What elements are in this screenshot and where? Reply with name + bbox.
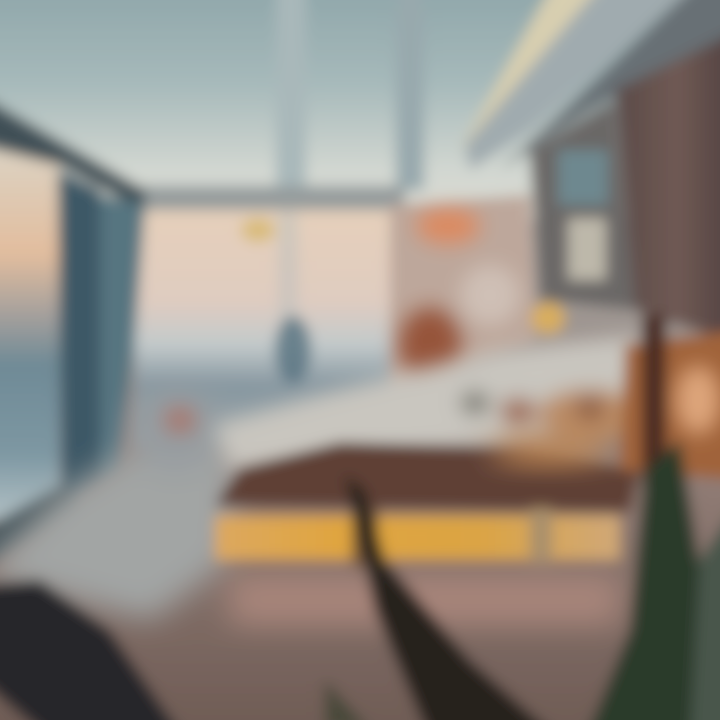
central window	[135, 205, 400, 445]
pendant light	[241, 218, 275, 242]
wooden counter band	[215, 435, 640, 512]
wall art panel	[390, 195, 565, 390]
sky	[0, 0, 720, 220]
foreground dark shape lower left	[0, 580, 185, 720]
window frame posts	[140, 0, 424, 384]
right ceiling beams	[460, 0, 720, 170]
right wood wall	[530, 30, 720, 345]
dark left frame	[0, 95, 145, 570]
floor	[0, 220, 720, 720]
glowing led strip	[215, 508, 620, 568]
right side warm lamp and post	[620, 315, 720, 485]
left window	[0, 150, 60, 520]
foreground dark plant leaves	[325, 440, 720, 720]
bed linen	[215, 335, 642, 470]
table object	[164, 406, 196, 434]
lower floor warm area	[230, 575, 620, 625]
lower left grey table area	[0, 390, 235, 620]
